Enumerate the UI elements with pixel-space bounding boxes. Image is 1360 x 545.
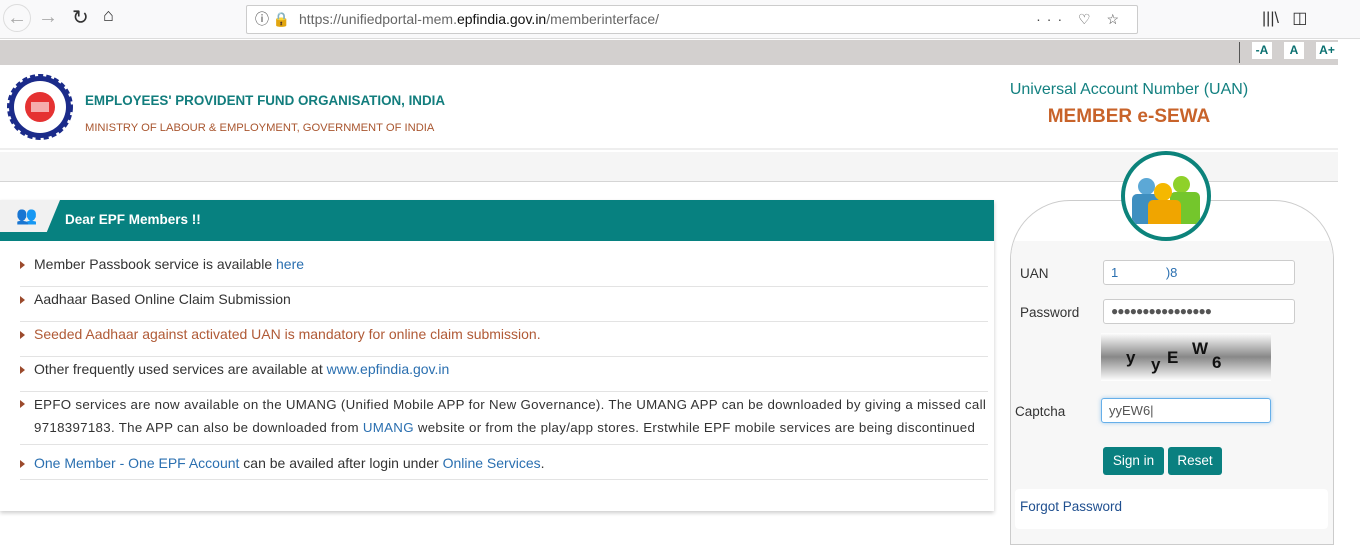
login form: Captcha	[1015, 404, 1065, 419]
url bar: ··· ♡ ☆	[1036, 11, 1125, 27]
browser toolbar: ⌂	[103, 5, 114, 25]
org name: EMPLOYEES' PROVIDENT FUND ORGANISATION, INDIA	[85, 93, 445, 108]
notice list	[20, 256, 988, 480]
gray bar with font size buttons: A	[1290, 43, 1298, 57]
captcha image: y	[1151, 355, 1160, 374]
gray bar with font size buttons	[0, 40, 1338, 65]
login form	[1015, 260, 1295, 514]
login form: Password	[1020, 305, 1079, 320]
captcha image: W	[1192, 339, 1208, 358]
banner heading: 👥	[16, 206, 37, 225]
login form: 1 )8	[1111, 265, 1177, 280]
browser toolbar: →	[38, 6, 58, 28]
browser toolbar: |||\ ◫	[1262, 10, 1307, 27]
notice list: Aadhaar Based Online Claim Submission	[34, 291, 291, 307]
gray strip	[0, 152, 1338, 182]
banner heading: Dear EPF Members !!	[65, 212, 201, 227]
logo	[7, 74, 73, 140]
nav icons: ←	[7, 7, 27, 29]
notice list: One Member - One EPF Account can be availed after login under Online Services.	[34, 455, 544, 471]
captcha image: 6	[1212, 353, 1221, 372]
buttons: Sign in	[1113, 453, 1154, 468]
gray bar with font size buttons: A+	[1319, 43, 1335, 57]
browser toolbar: ↻	[72, 7, 89, 29]
icon: members avatar	[1121, 151, 1211, 241]
panel: notices	[0, 200, 994, 511]
captcha image: y	[1126, 348, 1135, 367]
notice list: EPFO services are now available on the UMANG (Unified Mobile APP for New Governance). The UMANG APP can be downloaded by giving a missed call	[34, 397, 986, 412]
browser toolbar	[0, 0, 1360, 39]
captcha image	[1101, 333, 1271, 381]
buttons	[1103, 447, 1164, 475]
nav icons	[3, 4, 31, 32]
header	[0, 65, 1338, 150]
captcha image: E	[1167, 348, 1178, 367]
notice list: Seeded Aadhaar against activated UAN is mandatory for online claim submission.	[34, 326, 541, 342]
login form: UAN	[1020, 266, 1049, 281]
forgot password: Forgot Password	[1020, 499, 1122, 514]
login form: Reset	[1177, 453, 1213, 468]
url bar: https://unifiedportal-mem.epfindia.gov.in/memberinterface/	[299, 11, 659, 27]
portal title: Universal Account Number (UAN)	[1010, 81, 1248, 98]
url bar: ⓘ 🔒	[255, 11, 290, 27]
gray bar with font size buttons: -A	[1256, 43, 1268, 57]
notice list: 9718397183. The APP can also be downloaded from UMANG website or from the play/app stores. Erstwhile EPF mobile services are being discontinued	[34, 420, 975, 435]
login form: ●●●●●●●●●●●●●●●●	[1111, 304, 1211, 318]
notice list: Other frequently used services are available at www.epfindia.gov.in	[34, 361, 449, 377]
forgot password	[1015, 489, 1328, 529]
url bar	[246, 5, 1138, 34]
banner heading	[0, 200, 994, 241]
header: MEMBER e-SEWA	[1048, 106, 1210, 127]
notice list: Member Passbook service is available here	[34, 256, 304, 272]
header: MINISTRY OF LABOUR & EMPLOYMENT, GOVERNMENT OF INDIA	[85, 122, 434, 134]
login form: yyEW6|	[1109, 403, 1154, 418]
panel: login	[1010, 200, 1334, 545]
